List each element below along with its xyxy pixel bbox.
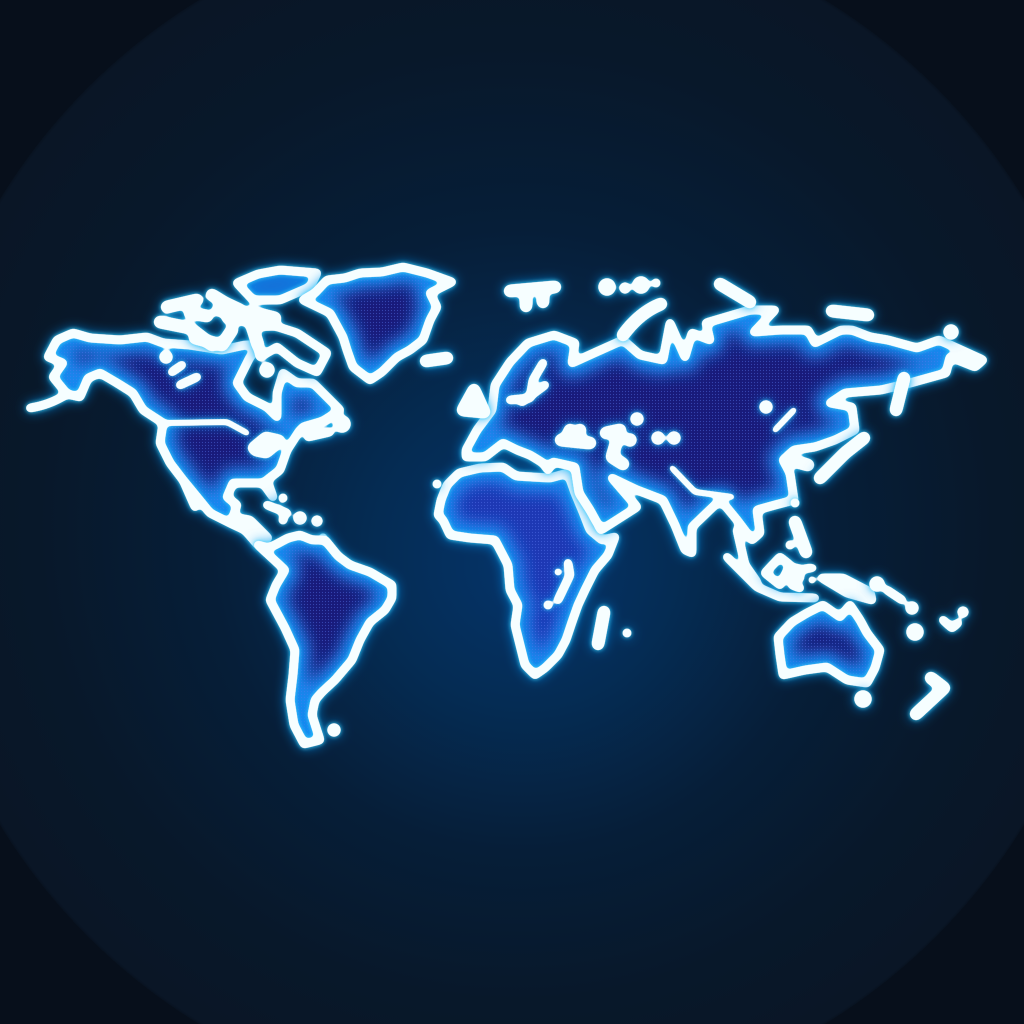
Sulawesi (792, 568, 810, 588)
US-Canada border (167, 422, 247, 433)
Madagascar and nearby islands (432, 479, 632, 644)
Franz Josef Land (598, 276, 661, 296)
New Guinea (822, 578, 872, 600)
continent: Eurasia (460, 300, 990, 598)
Borneo (765, 557, 790, 585)
Korea (790, 460, 808, 465)
Baja California (184, 482, 195, 507)
Wrangel dot (943, 324, 959, 340)
Philippines (795, 522, 806, 552)
continent: Africa (430, 460, 620, 680)
Himalaya line (672, 468, 732, 497)
Iceland (426, 358, 447, 361)
Lake Baikal (775, 410, 794, 430)
continent: North America (19, 320, 358, 556)
Newfoundland (303, 415, 351, 437)
New Siberian Islands (832, 311, 868, 315)
Black Sea (561, 430, 590, 443)
Arctic islands (160, 270, 327, 378)
Greenland (290, 260, 460, 390)
Baltic (510, 363, 545, 402)
Southeast Asian islands (765, 498, 872, 600)
Alaska tail (30, 394, 67, 408)
Malay and Java arc (727, 530, 815, 598)
Japan and Sakhalin (820, 378, 904, 478)
Pacific islands and New Zealand (854, 576, 969, 714)
Caspian Sea (606, 430, 623, 464)
Severnaya Zemlya (720, 284, 750, 302)
Canada lakes (159, 350, 197, 385)
Britain and Ireland (463, 390, 484, 412)
Arctic Eurasian islands (510, 276, 959, 340)
continent: Australia (770, 600, 890, 690)
New Zealand (916, 678, 944, 714)
African lakes (558, 563, 570, 600)
Svalbard (510, 287, 555, 306)
continent: South America (250, 530, 400, 750)
Great Lakes (254, 438, 279, 452)
Inland dots (623, 400, 773, 447)
Caribbean islands (267, 493, 328, 543)
Novaya Zemlya (623, 304, 661, 335)
